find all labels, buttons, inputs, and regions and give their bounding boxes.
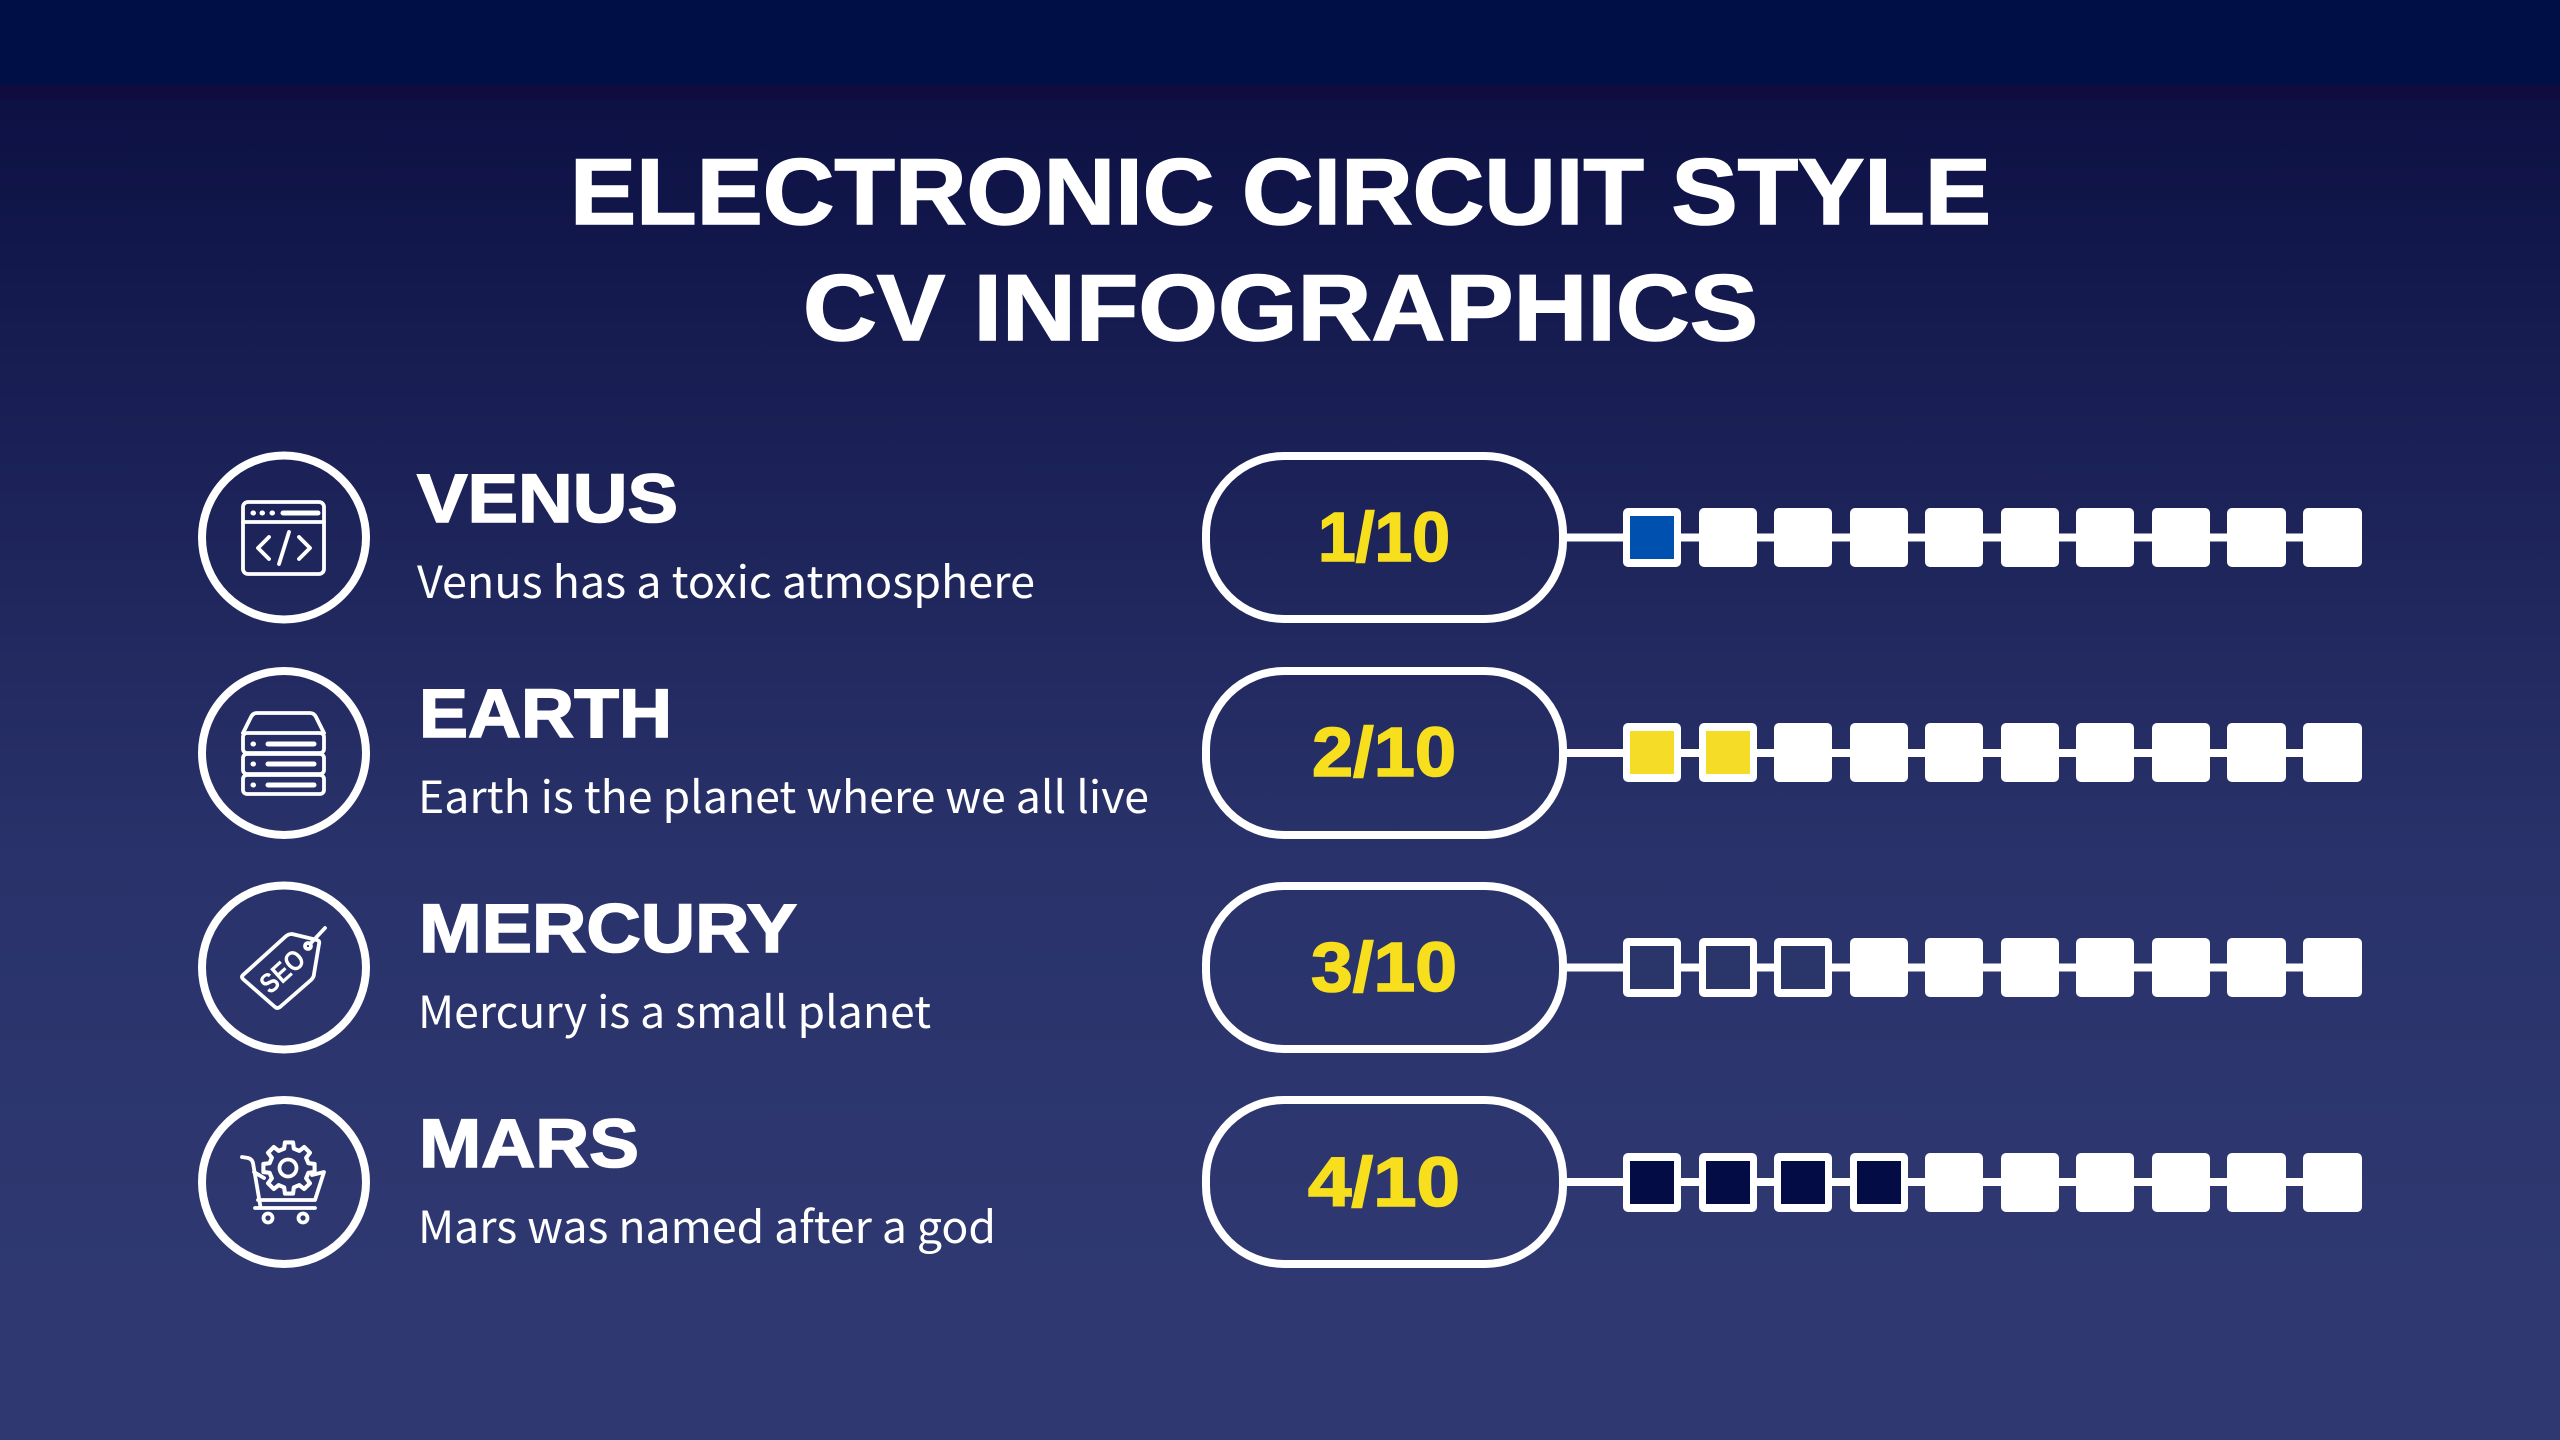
score pill: 2/10: 2/10 bbox=[1312, 713, 1456, 791]
circuit bar: 3 of 10 bbox=[1567, 938, 2362, 997]
heading: Mars: MARS bbox=[419, 1105, 639, 1182]
score pill: 3/10 bbox=[1206, 886, 1563, 1049]
row: Mercury bbox=[202, 886, 2362, 1050]
score pill: 1/10: 1/10 bbox=[1318, 498, 1450, 576]
circuit bar: 1 of 10 bbox=[1567, 508, 2362, 567]
score pill: 4/10: 4/10 bbox=[1308, 1143, 1460, 1221]
icon: server stack bbox=[202, 671, 366, 835]
heading: Earth: EARTH bbox=[419, 675, 672, 752]
icon: SEO tag bbox=[202, 886, 366, 1050]
circuit bar: 2 of 10 bbox=[1567, 723, 2362, 782]
description: Venus: Venus has a toxic atmosphere bbox=[417, 547, 1035, 611]
title: CV INFOGRAPHICS bbox=[803, 255, 1758, 360]
description: Mercury: Mercury is a small planet bbox=[418, 977, 931, 1041]
row: Mars bbox=[202, 1100, 2362, 1264]
heading: Venus: VENUS bbox=[417, 460, 678, 537]
title: ELECTRONIC CIRCUIT STYLE bbox=[570, 139, 1991, 244]
score pill: 3/10: 3/10 bbox=[1311, 928, 1457, 1006]
icon: code window bbox=[202, 456, 366, 620]
description: Mars: Mars was named after a god bbox=[418, 1192, 996, 1256]
score pill: 4/10 bbox=[1206, 1100, 1563, 1264]
title bbox=[570, 139, 1991, 360]
circuit bar: 4 of 10 bbox=[1567, 1153, 2362, 1212]
icon: SEO tag: SEO bbox=[253, 943, 311, 1000]
score pill: 1/10 bbox=[1206, 456, 1563, 619]
icon: cart with gear bbox=[202, 1100, 366, 1264]
row: Venus bbox=[202, 456, 2362, 620]
row: Earth bbox=[202, 671, 2362, 835]
score pill: 2/10 bbox=[1206, 671, 1563, 835]
description: Earth: Earth is the planet where we all live bbox=[418, 762, 1149, 826]
heading: Mercury: MERCURY bbox=[419, 890, 797, 967]
